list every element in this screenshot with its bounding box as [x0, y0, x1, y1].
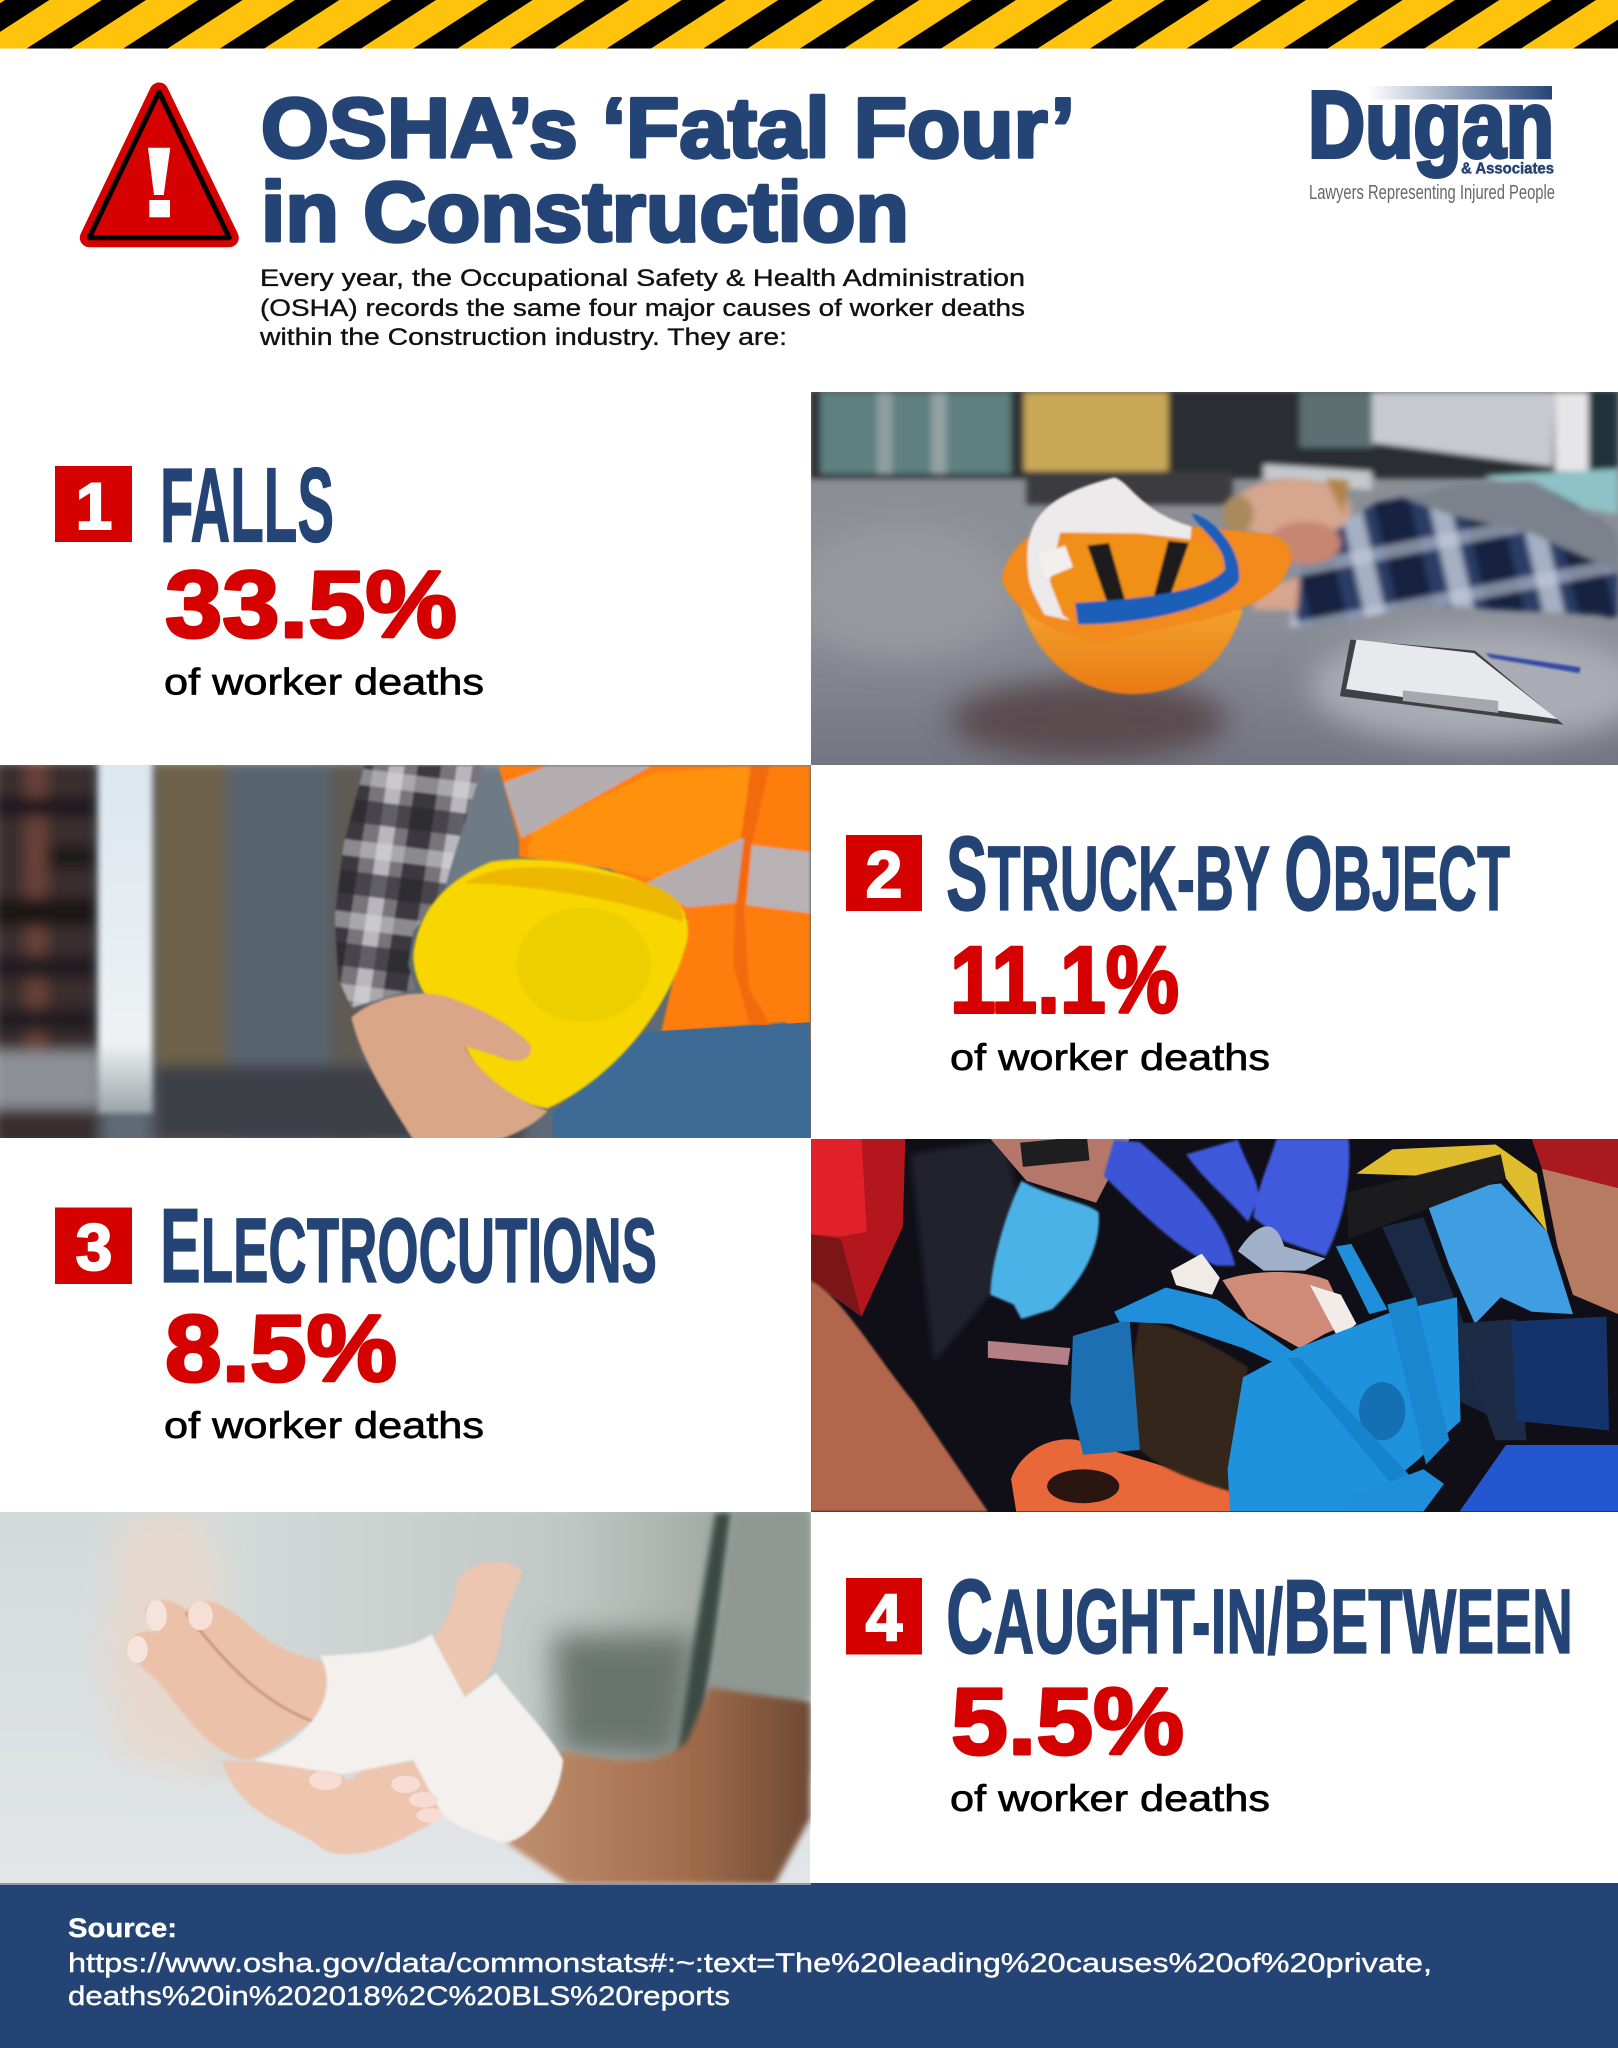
- footer: source: https://www.osha.gov/data/commonstats#:~:text=The%20leading%20causes%20of%20private,: [68, 1948, 1432, 1978]
- clipboard: [1340, 640, 1581, 725]
- bandage: [253, 1634, 563, 1843]
- heading: falls: FALLS: [160, 446, 334, 564]
- footer: source: [0, 1883, 1618, 2048]
- caption: of worker deaths: [950, 1037, 1270, 1078]
- logo: Dugan & Associates: Dugan: [1308, 72, 1554, 178]
- intro text block: Every year, the Occupational Safety & Health Administration: [260, 265, 1025, 292]
- number badge 2: 2: [866, 837, 902, 911]
- vest: [499, 766, 810, 1041]
- yellow helmet: [413, 859, 688, 1108]
- logo: Dugan & Associates: & Associates: [1461, 160, 1554, 178]
- hazard stripe band: [0, 0, 1618, 48]
- yellow board, shirt and strap: [1356, 1145, 1547, 1232]
- photo: bandaged hand: [0, 1503, 810, 1891]
- number badge 1: 1: [76, 469, 112, 543]
- caption: of worker deaths: [164, 662, 484, 703]
- number badge 2: [846, 835, 922, 911]
- number badge 4: [846, 1578, 922, 1654]
- photo: worker holding yellow hard hat: [0, 759, 827, 1152]
- title: in Construction: [261, 165, 909, 259]
- plaid sleeve: [335, 766, 483, 1008]
- panel: struck-by object: [846, 815, 1510, 1078]
- title: OSHA’s ‘Fatal Four’: [261, 81, 1075, 175]
- footer: source: deaths%20in%202018%2C%20BLS%20reports: [68, 1981, 730, 2011]
- thumb: [434, 1562, 522, 1697]
- number badge 1: [55, 466, 132, 543]
- oxygen mask: [1238, 1226, 1326, 1271]
- stat: 8.5%: 8.5%: [165, 1296, 397, 1402]
- right forearm: [506, 1687, 810, 1884]
- photo: fallen worker and orange hard hat: [789, 390, 1618, 773]
- panel: electrocutions: [55, 1187, 657, 1446]
- upper fingers: [127, 1601, 340, 1760]
- pale blue glove: [990, 1181, 1099, 1319]
- number badge 3: [55, 1208, 132, 1284]
- photo: paramedics treating patient on stretcher: [810, 1130, 1618, 1518]
- logo: Dugan & Associates: [1308, 72, 1555, 204]
- intro text block: within the Construction industry. They are:: [259, 324, 787, 351]
- forearm: [990, 1139, 1130, 1203]
- number badge 4: 4: [866, 1580, 903, 1654]
- caption: of worker deaths: [950, 1778, 1270, 1819]
- caption: of worker deaths: [164, 1405, 484, 1446]
- panel: falls: [55, 446, 484, 703]
- number badge 3: 3: [76, 1210, 112, 1284]
- orange board: [1011, 1439, 1238, 1511]
- stat: 33.5%: 33.5%: [165, 552, 457, 658]
- stat: 5.5%: 5.5%: [951, 1669, 1184, 1775]
- icon: warning triangle: [89, 92, 229, 238]
- title: [261, 81, 1075, 259]
- lower fingers: [222, 1760, 441, 1854]
- red sleeve and skin top right: [1532, 1139, 1618, 1191]
- footer: source: Source:: [68, 1913, 177, 1943]
- hand: [351, 994, 548, 1140]
- hair: [1131, 1321, 1248, 1494]
- hard hat: [1002, 478, 1291, 694]
- heading: struck-by object: STRUCK-BY OBJECT: [946, 815, 1510, 933]
- intro text block: [259, 265, 1025, 351]
- blue gloves: [1104, 1139, 1349, 1266]
- stat: 11.1%: 11.1%: [950, 928, 1179, 1034]
- panel: caught-in/between: [846, 1558, 1573, 1819]
- heading: electrocutions: ELECTROCUTIONS: [160, 1187, 657, 1305]
- face: [1222, 1272, 1334, 1348]
- intro text block: (OSHA) records the same four major causes of worker deaths: [260, 295, 1025, 322]
- jeans: [553, 1022, 810, 1140]
- head blocks: [1070, 1244, 1461, 1511]
